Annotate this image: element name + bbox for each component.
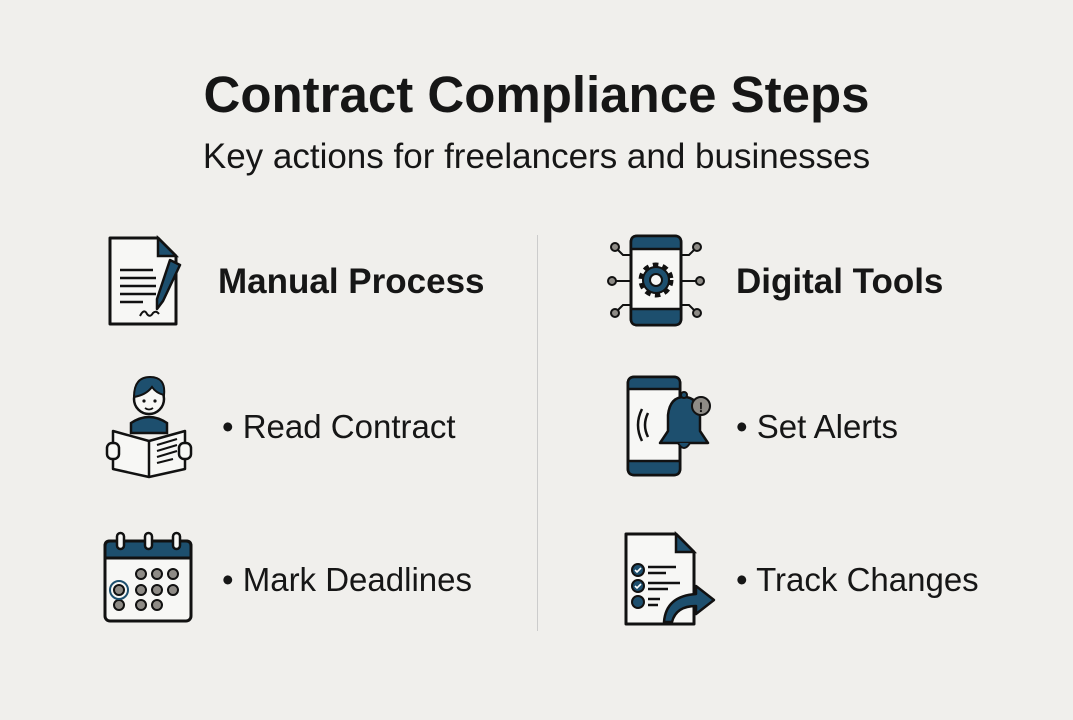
icon: phone with gear bbox=[607, 234, 705, 326]
icon: phone with bell: ! bbox=[699, 399, 703, 415]
bullet: Set Alerts: • Set Alerts bbox=[736, 408, 898, 445]
divider bbox=[537, 235, 538, 631]
subtitle: Key actions for freelancers and businesses bbox=[203, 137, 870, 176]
icon: person reading bbox=[106, 376, 192, 478]
title: Contract Compliance Steps bbox=[204, 66, 869, 123]
heading: Digital Tools: Digital Tools bbox=[736, 262, 943, 301]
icon: document with checklist and arrow bbox=[624, 531, 716, 626]
icon: contract document bbox=[108, 235, 182, 326]
icon: calendar bbox=[104, 532, 192, 622]
heading: Manual Process: Manual Process bbox=[218, 262, 484, 301]
bullet: Read Contract: • Read Contract bbox=[222, 408, 456, 445]
icon: phone with bell bbox=[626, 376, 711, 476]
bullet: Mark Deadlines: • Mark Deadlines bbox=[222, 561, 472, 598]
bullet: Track Changes: • Track Changes bbox=[736, 561, 979, 598]
